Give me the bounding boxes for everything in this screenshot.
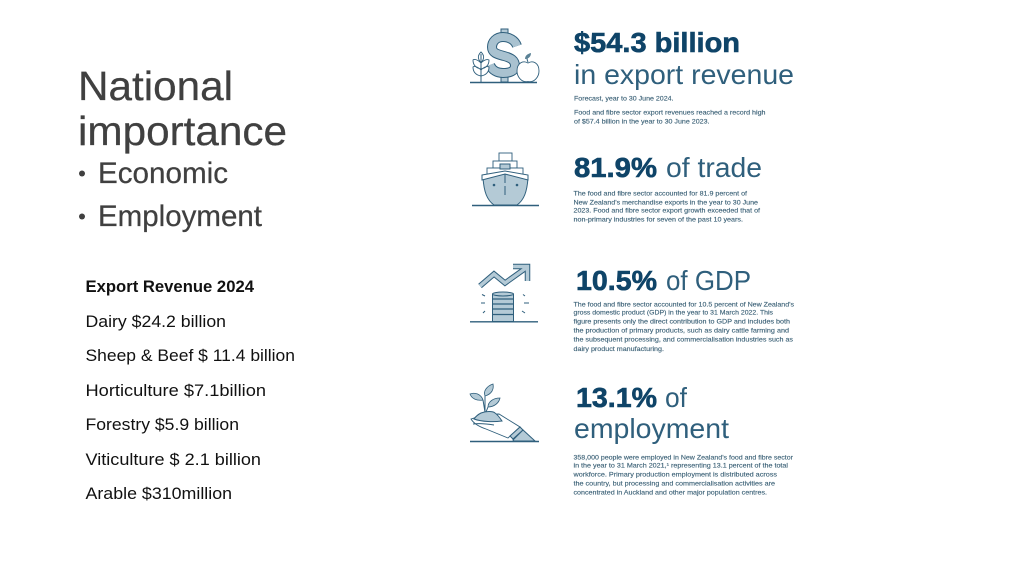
text block: GDP detail: the subsequent processing, and commercialisation industries such as — [574, 336, 794, 344]
text block: export revenue by sector: Horticulture $7.1billion — [86, 382, 266, 400]
heading: share of trade — [574, 152, 762, 183]
heading: share of employment — [574, 382, 729, 444]
text block: employment detail: 358,000 people were employed in New Zealand's food and fibre sector — [574, 454, 794, 462]
heading: share of GDP: of GDP — [666, 265, 751, 296]
heading: share of employment: of — [665, 382, 687, 413]
bullet list: themes — [79, 157, 262, 233]
text block: employment detail — [572, 454, 794, 496]
title — [78, 63, 287, 154]
text block: trade detail: The food and fibre sector accounted for 81.9 percent of — [574, 190, 747, 198]
heading: share of GDP: 10.5% — [576, 265, 657, 296]
text block: GDP detail: The food and fibre sector accounted for 10.5 percent of New Zealand's — [574, 302, 795, 308]
icon: hand holding seedling — [470, 384, 539, 442]
icon: dollar sign with wheat and apple — [470, 29, 539, 82]
text block: export revenue detail: Food and fibre sector export revenues reached a record high — [574, 110, 766, 116]
text block: export revenue detail: Forecast, year to 30 June 2024. — [574, 96, 674, 102]
text block: trade detail — [574, 190, 760, 224]
title: National — [78, 63, 233, 109]
text block: export revenue by sector: Viticulture $ 2.1 billion — [86, 451, 261, 469]
text block: employment detail: concentrated in Auckland and other major population centres. — [574, 490, 767, 496]
text block: trade detail: non-primary industries for seven of the past 10 years. — [574, 216, 743, 224]
heading: export revenue: in export revenue — [574, 59, 794, 90]
heading: export revenue: $54.3 billion — [574, 27, 740, 58]
icon: growth arrow over coin stack — [470, 266, 538, 322]
text block: export revenue by sector: Arable $310million — [86, 485, 232, 503]
text block: GDP detail: the production of primary products, such as dairy cattle farming and — [574, 328, 789, 334]
text block: export revenue by sector — [86, 278, 295, 503]
text block: trade detail: 2023. Food and fibre sector export growth exceeded that of — [574, 208, 760, 214]
text block: export revenue detail: of $57.4 billion in the year to 30 June 2023. — [574, 118, 710, 126]
bullet list: themes: Employment — [98, 200, 262, 233]
text block: export revenue detail — [574, 96, 766, 126]
heading: export revenue — [574, 27, 794, 90]
title: importance — [78, 108, 287, 154]
text block: export revenue by sector: Forestry $5.9 billion — [86, 416, 239, 434]
heading: share of employment: employment — [574, 413, 729, 444]
text block: GDP detail: dairy product manufacturing. — [574, 346, 664, 353]
text block: export revenue by sector: Dairy $24.2 billion — [86, 313, 226, 331]
text block: GDP detail: gross domestic product (GDP) in the year to 31 March 2022. This — [574, 310, 774, 316]
text block: GDP detail: figure presents only the direct contribution to GDP and includes both — [574, 318, 790, 326]
text block: employment detail: in the year to 31 March 2021,¹ representing 13.1 percent of the total — [574, 462, 789, 470]
text block: employment detail: the country, but processing and commercialisation activities are — [574, 480, 775, 488]
heading: share of trade: 81.9% — [574, 152, 657, 183]
heading: share of GDP — [576, 265, 751, 296]
heading: share of employment: 13.1% — [576, 382, 657, 413]
icon: container ship — [472, 153, 539, 206]
text block: export revenue by sector: Export Revenue 2024 — [86, 278, 255, 296]
heading: share of trade: of trade — [666, 152, 762, 183]
text block: trade detail: New Zealand's merchandise exports in the year to 30 June — [574, 200, 758, 206]
bullet list: themes: Economic — [98, 157, 228, 190]
text block: export revenue by sector: Sheep & Beef $ 11.4 billion — [86, 347, 295, 365]
text block: employment detail: workforce. Primary production employment is distributed across — [572, 472, 778, 478]
text block: GDP detail — [574, 302, 795, 353]
